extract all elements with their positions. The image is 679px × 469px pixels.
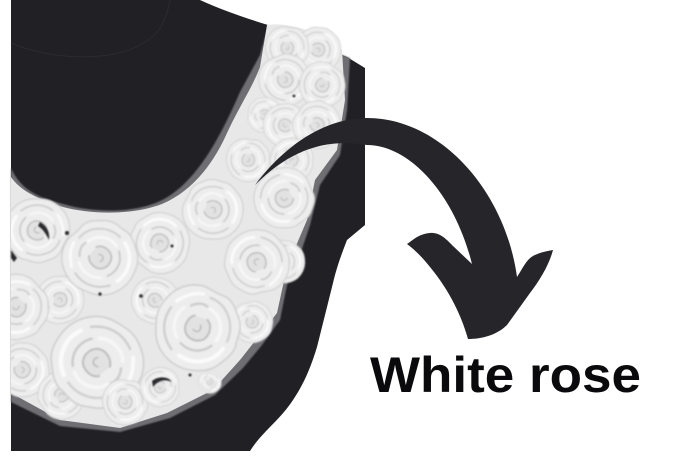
collar tulle edge [11, 26, 350, 432]
collar roses [0, 21, 354, 429]
mannequin bust [11, 0, 365, 451]
lace collar [0, 21, 354, 432]
mannequin neck seam [11, 0, 170, 57]
collar dark gaps [11, 95, 295, 387]
label: White rose: White rose [370, 347, 641, 403]
curved arrow pointing from the collar to the label [255, 118, 553, 339]
collar base [11, 24, 345, 428]
